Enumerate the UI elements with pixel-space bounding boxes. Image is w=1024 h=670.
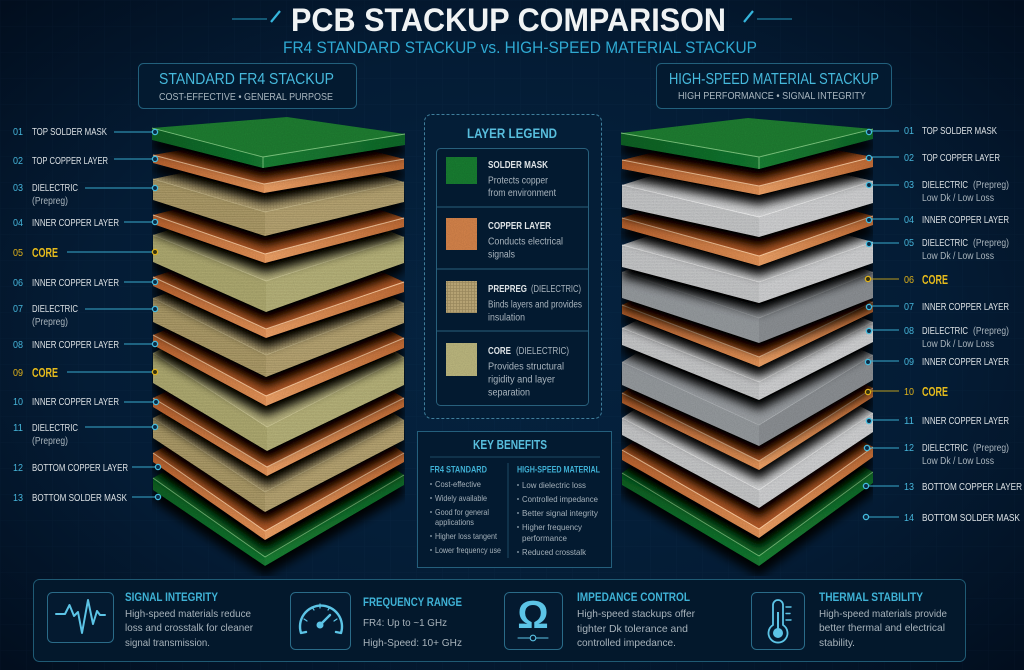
- high-speed benefits column: performance: [522, 533, 567, 543]
- label 12: 12: [904, 442, 914, 454]
- label 05: (Prepreg): [973, 238, 1009, 249]
- legend: prepreg: (DIELECTRIC): [531, 284, 581, 295]
- layer 04 inner copper: [622, 178, 873, 276]
- layer 01 top solder mask: [152, 117, 405, 178]
- layer 10 core: [622, 292, 873, 456]
- icon: omega: Ω: [517, 594, 549, 637]
- label 03: (Prepreg): [32, 196, 68, 207]
- feature: impedance control: [504, 592, 695, 650]
- label 07: [13, 303, 158, 328]
- feature: thermal stability: stability.: [819, 637, 855, 649]
- feature: impedance control: tighter Dk tolerance and: [577, 623, 688, 635]
- label 13: 13: [904, 481, 914, 493]
- chart: standard FR4 layer stack: [152, 117, 405, 576]
- label 07: (Prepreg): [32, 317, 68, 328]
- panel: high-speed header: [656, 64, 892, 108]
- label 14: 14: [904, 512, 914, 524]
- FR4 benefits column: [430, 464, 501, 555]
- label 08: [866, 325, 1009, 350]
- feature: frequency range: FR4: Up to ~1 GHz: [363, 617, 447, 629]
- label 03: [13, 182, 158, 207]
- label 02: TOP COPPER LAYER: [32, 156, 108, 167]
- layer 08 inner copper: [622, 250, 873, 377]
- label 06: INNER COPPER LAYER: [32, 278, 119, 289]
- label 06 core: [865, 272, 948, 287]
- label 13: [863, 481, 1022, 493]
- feature: frequency range: High-Speed: 10+ GHz: [363, 637, 462, 649]
- legend: prepreg: Binds layers and provides: [488, 300, 582, 310]
- label 03: Low Dk / Low Loss: [922, 193, 994, 204]
- icon: omega: [504, 592, 562, 650]
- panel: standard FR4 header: STANDARD FR4 STACKUP: [159, 71, 334, 88]
- panel: high-speed header: HIGH-SPEED MATERIAL STACKUP: [669, 71, 879, 88]
- layer 08 inner copper: [153, 277, 404, 416]
- label 05 core: [13, 245, 158, 260]
- label 11: 11: [904, 415, 914, 427]
- label 05 core: 05: [13, 247, 23, 259]
- label 03: [866, 179, 1009, 204]
- panel: standard FR4 header: [138, 64, 356, 108]
- label 05: [866, 237, 1009, 262]
- label 10 core: 10: [904, 386, 914, 398]
- layer 14 bottom solder mask: [622, 389, 873, 576]
- feature: signal integrity: High-speed materials reduce: [125, 608, 251, 620]
- high-speed benefits column: [517, 464, 600, 557]
- label 01: 01: [13, 126, 23, 138]
- subtitle: FR4 STANDARD STACKUP vs. HIGH-SPEED MATERIAL STACKUP: [283, 39, 757, 57]
- label 09 core: CORE: [32, 365, 58, 380]
- label 11: (Prepreg): [32, 436, 68, 447]
- label 01: TOP SOLDER MASK: [922, 126, 997, 137]
- icon: heartbeat waveform: [48, 592, 114, 642]
- label 13: 13: [13, 492, 23, 504]
- label 05: 05: [904, 237, 914, 249]
- label 11: 11: [13, 422, 23, 434]
- label 12: Low Dk / Low Loss: [922, 456, 994, 467]
- feature: impedance control: High-speed stackups offer: [577, 608, 695, 620]
- feature: thermal stability: THERMAL STABILITY: [819, 592, 923, 604]
- label 10: INNER COPPER LAYER: [32, 397, 119, 408]
- FR4 benefits column: applications: [435, 517, 474, 527]
- label 02: 02: [904, 152, 914, 164]
- label 09: [865, 356, 1009, 368]
- label 04: [866, 214, 1009, 226]
- legend: copper layer: [446, 218, 563, 260]
- legend: solder mask: from environment: [488, 188, 556, 199]
- layer 12 dielectric: [622, 341, 873, 518]
- FR4 benefits column: Lower frequency use: [435, 545, 501, 555]
- feature: impedance control: controlled impedance.: [577, 637, 676, 649]
- layer 03 prepreg: [153, 149, 404, 246]
- label 10: [13, 396, 159, 408]
- layer 12 bottom copper: [153, 375, 404, 550]
- label 05: DIELECTRIC: [922, 238, 968, 249]
- label 08: 08: [13, 339, 23, 351]
- layer 11 inner copper: [622, 320, 873, 480]
- label 03: DIELECTRIC: [922, 180, 968, 191]
- layer 06 core: [622, 226, 873, 353]
- layer 05 core: [153, 191, 404, 322]
- label 08: Low Dk / Low Loss: [922, 339, 994, 350]
- label 02: [866, 152, 1000, 164]
- label 05: Low Dk / Low Loss: [922, 251, 994, 262]
- label 14: [863, 512, 1020, 524]
- panel: high-speed header: HIGH PERFORMANCE • SIGNAL INTEGRITY: [678, 90, 866, 102]
- legend: core: CORE: [488, 346, 511, 357]
- legend: core: [446, 343, 569, 398]
- key benefits heading: KEY BENEFITS: [473, 438, 547, 452]
- legend: solder mask: SOLDER MASK: [488, 160, 549, 171]
- label 06 core: CORE: [922, 272, 948, 287]
- layer 13 bottom copper: [622, 368, 873, 548]
- label 07: DIELECTRIC: [32, 304, 78, 315]
- legend: prepreg: insulation: [488, 312, 525, 324]
- high-speed benefits column: Low dielectric loss: [522, 480, 586, 490]
- high-speed benefits column: HIGH-SPEED MATERIAL: [517, 464, 600, 474]
- layer 10 inner copper: [153, 329, 404, 486]
- label 03: 03: [904, 179, 914, 191]
- layer 11 prepreg: [153, 346, 404, 522]
- label 03: (Prepreg): [973, 180, 1009, 191]
- label 12: (Prepreg): [973, 443, 1009, 454]
- feature: signal integrity: loss and crosstalk for cleaner: [125, 622, 253, 634]
- layer 09 dielectric: [622, 268, 873, 410]
- feature: signal integrity: [48, 592, 253, 649]
- chart: high-speed layer stack: [621, 118, 873, 576]
- layer 03 dielectric: [622, 149, 873, 247]
- legend: prepreg: PREPREG: [488, 284, 527, 295]
- legend: copper layer: COPPER LAYER: [488, 221, 552, 232]
- label 01: [866, 125, 997, 137]
- label 08: DIELECTRIC: [922, 326, 968, 337]
- label 11: [13, 422, 158, 447]
- layer 13 bottom solder mask: [153, 396, 404, 576]
- label 08: INNER COPPER LAYER: [32, 340, 119, 351]
- high-speed benefits column: Higher frequency: [522, 522, 583, 532]
- FR4 benefits column: Cost-effective: [435, 479, 481, 489]
- label 07: [866, 301, 1009, 313]
- legend: copper layer: signals: [488, 250, 515, 260]
- label 03: 03: [13, 182, 23, 194]
- label 07: 07: [904, 301, 914, 313]
- panel: standard FR4 header: COST-EFFECTIVE • GENERAL PURPOSE: [159, 91, 333, 103]
- layer 05 dielectric: [622, 205, 873, 313]
- feature: thermal stability: High-speed materials provide: [819, 608, 947, 620]
- label 04: 04: [904, 214, 914, 226]
- label 10 core: CORE: [922, 384, 948, 399]
- legend heading: LAYER LEGEND: [467, 126, 557, 141]
- layer 02 top copper: [622, 131, 873, 205]
- feature: frequency range: FREQUENCY RANGE: [363, 597, 462, 609]
- layer 09 core: [153, 283, 404, 461]
- label 04: 04: [13, 217, 23, 229]
- label 03: DIELECTRIC: [32, 183, 78, 194]
- title: PCB STACKUP COMPARISON: [291, 2, 726, 38]
- FR4 benefits column: Widely available: [435, 493, 487, 503]
- label 02: 02: [13, 155, 23, 167]
- legend: prepreg: [446, 281, 582, 324]
- label 09 core: 09: [13, 367, 23, 379]
- label 11: DIELECTRIC: [32, 423, 78, 434]
- legend: core: separation: [488, 388, 530, 398]
- feature: signal integrity: signal transmission.: [125, 637, 210, 649]
- FR4 benefits column: Higher loss tangent: [435, 531, 498, 541]
- labels: standard FR4: [13, 126, 161, 504]
- high-speed benefits column: Controlled impedance: [522, 494, 598, 504]
- label 06: 06: [13, 277, 23, 289]
- FR4 benefits column: Good for general: [435, 507, 489, 517]
- legend: core: rigidity and layer: [488, 374, 556, 386]
- label 11: [866, 415, 1009, 427]
- label 12: [864, 442, 1009, 467]
- FR4 benefits column: FR4 STANDARD: [430, 464, 487, 474]
- label 10: 10: [13, 396, 23, 408]
- label 12: DIELECTRIC: [922, 443, 968, 454]
- layer 04 inner copper: [153, 179, 404, 273]
- label 07: 07: [13, 303, 23, 315]
- label 09 core: [13, 365, 158, 380]
- layer 01 top solder mask: [621, 118, 873, 179]
- label 10 core: [865, 384, 948, 399]
- feature: thermal stability: [752, 592, 947, 650]
- label 02: [13, 155, 158, 167]
- layer 07 prepreg: [153, 246, 404, 387]
- label 01: TOP SOLDER MASK: [32, 127, 107, 138]
- label 08: 08: [904, 325, 914, 337]
- labels: high-speed: [863, 125, 1022, 524]
- panel: key benefits: [418, 432, 612, 568]
- label 09: 09: [904, 356, 914, 368]
- label 06 core: 06: [904, 274, 914, 286]
- label 12: 12: [13, 462, 23, 474]
- feature: frequency range: [290, 592, 462, 650]
- label 12: BOTTOM COPPER LAYER: [32, 463, 128, 474]
- legend: core: (DIELECTRIC): [516, 346, 569, 357]
- label 02: TOP COPPER LAYER: [922, 153, 1000, 164]
- panel: bottom features: [34, 580, 966, 662]
- icon: speed gauge: [290, 592, 350, 650]
- label 05 core: CORE: [32, 245, 58, 260]
- legend: copper layer: Conducts electrical: [488, 236, 563, 248]
- label 01: 01: [904, 125, 914, 137]
- label 08: (Prepreg): [973, 326, 1009, 337]
- label 04: INNER COPPER LAYER: [32, 218, 119, 229]
- layer 02 top copper: [153, 130, 404, 203]
- label 13: BOTTOM SOLDER MASK: [32, 493, 127, 504]
- legend: solder mask: [446, 157, 556, 199]
- feature: impedance control: IMPEDANCE CONTROL: [577, 592, 690, 604]
- panel: layer legend: [424, 114, 602, 418]
- layer 06 inner copper: [153, 230, 404, 348]
- legend: solder mask: Protects copper: [488, 176, 549, 186]
- feature: thermal stability: better thermal and electrical: [819, 622, 945, 634]
- icon: thermometer: [752, 592, 804, 650]
- feature: signal integrity: SIGNAL INTEGRITY: [125, 592, 218, 604]
- legend: core: Provides structural: [488, 362, 564, 372]
- high-speed benefits column: Better signal integrity: [522, 508, 599, 518]
- label 01: [13, 126, 158, 138]
- high-speed benefits column: Reduced crosstalk: [522, 547, 587, 557]
